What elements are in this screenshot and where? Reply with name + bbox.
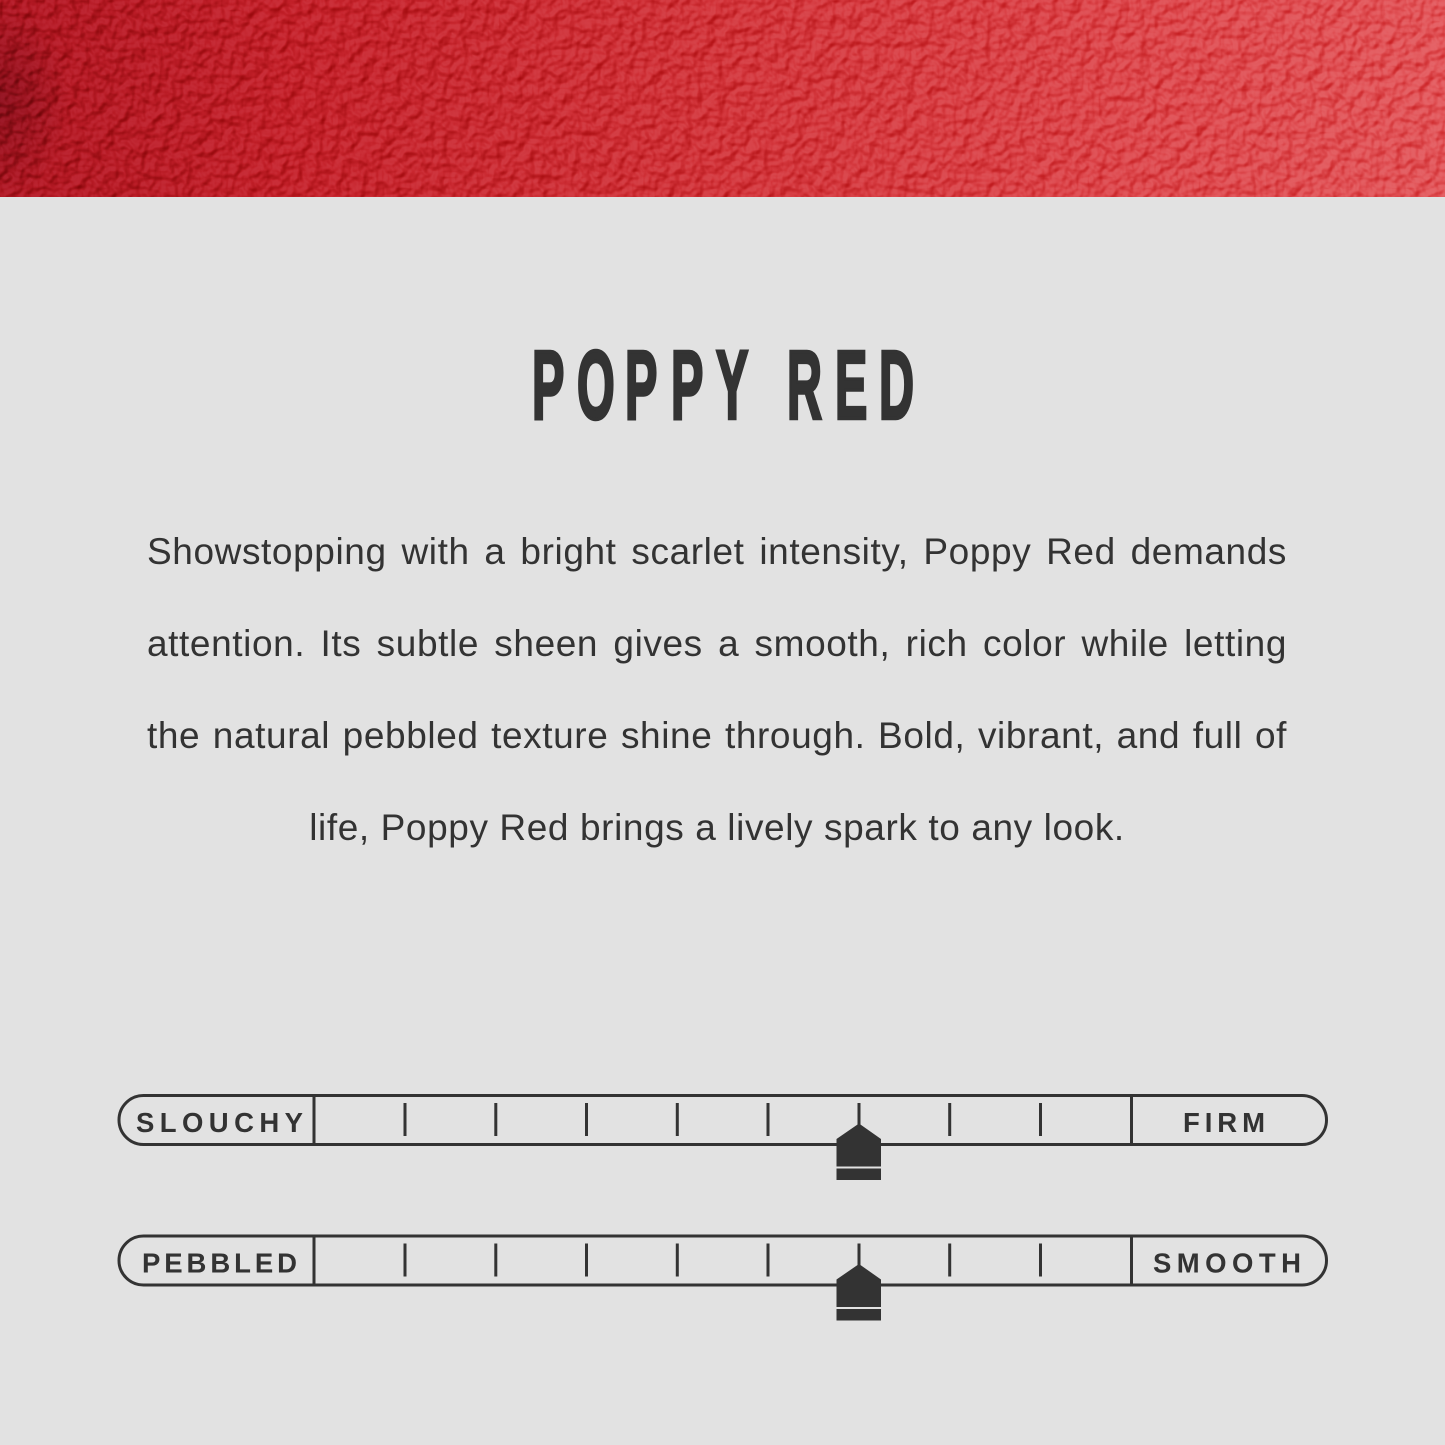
gauge: slouchy to firm: SLOUCHY (136, 1107, 303, 1138)
title: POPPY RED (532, 332, 914, 440)
leather texture banner (0, 0, 1445, 197)
gauge: pebbled to smooth (119, 1236, 1326, 1320)
description text block: the natural pebbled texture shine through. Bold, vibrant, and full of (147, 715, 1287, 756)
gauge: pebbled to smooth: SMOOTH (1153, 1248, 1301, 1278)
description text block: life, Poppy Red brings a lively spark to any look. (309, 807, 1125, 848)
marker: pebbled to smooth position (836, 1264, 881, 1320)
gauge: slouchy to firm: FIRM (1183, 1107, 1265, 1138)
marker: slouchy to firm position (836, 1124, 881, 1180)
description text block: Showstopping with a bright scarlet intensity, Poppy Red demands (147, 531, 1287, 572)
description text block (147, 531, 1287, 848)
gauge: slouchy to firm (119, 1095, 1326, 1180)
gauge: pebbled to smooth: PEBBLED (142, 1248, 297, 1278)
description text block: attention. Its subtle sheen gives a smooth, rich color while letting (147, 623, 1287, 664)
